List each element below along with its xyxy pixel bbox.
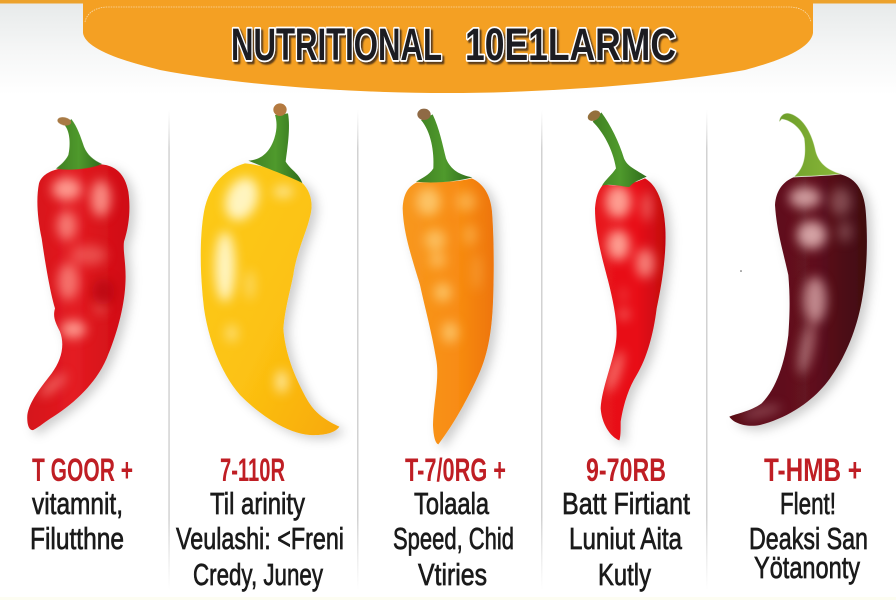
speck	[740, 270, 742, 272]
column 5 text	[749, 452, 868, 585]
pepper 3: orange	[403, 109, 494, 444]
pepper 2: yellow	[201, 103, 339, 435]
column 3 text	[393, 452, 514, 592]
column 1 text	[30, 452, 133, 556]
column 4 text: Batt Firtiant	[562, 486, 690, 521]
title	[231, 19, 676, 70]
column 5 text: Flent!	[780, 486, 836, 521]
column 4 text: 9-70RB	[586, 452, 666, 488]
column dividers	[168, 110, 708, 590]
column 5 text: Yötanonty	[754, 550, 860, 585]
title: NUTRITIONAL	[231, 19, 442, 70]
column 4 text: Kutly	[598, 557, 651, 592]
column 2 text	[176, 452, 344, 592]
pepper 1: red	[27, 116, 129, 430]
column 3 text: Speed, Chid	[393, 521, 514, 556]
column 1 text: vitamnit,	[32, 486, 123, 521]
column 1 text: T GOOR +	[32, 452, 133, 488]
column 4 text	[562, 452, 690, 592]
column 2 text: Til arinity	[210, 486, 305, 521]
column 5 text: T-HMB +	[764, 452, 862, 488]
column 3 text: Vtiries	[418, 557, 487, 592]
column 2 text: 7-110R	[220, 452, 285, 488]
column 3 text: T-7/0RG +	[405, 452, 506, 488]
column 2 text: Veulashi: <Freni	[176, 521, 344, 556]
pepper 5: dark burgundy	[729, 113, 867, 426]
page background	[0, 0, 896, 95]
title: 10E1LARMC	[465, 19, 676, 70]
banner	[83, 0, 813, 93]
column 1 text: Filutthne	[30, 521, 124, 556]
column 2 text: Credy, Juney	[193, 557, 323, 592]
column 4 text: Luniut Aita	[569, 521, 683, 556]
top edge strip	[0, 0, 896, 4]
column 3 text: Tolaala	[414, 486, 490, 521]
pepper 4: red	[586, 108, 666, 440]
